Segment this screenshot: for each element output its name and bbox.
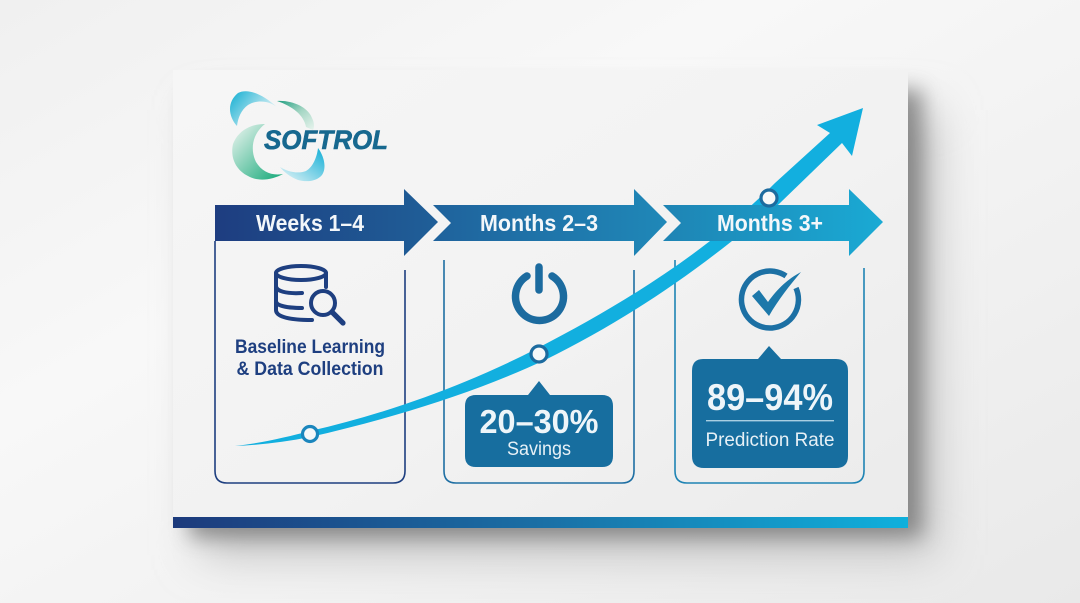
bottom gradient bar (173, 517, 908, 528)
panel: main card (173, 70, 908, 528)
panel: months 3+ (675, 260, 864, 483)
logo: Softrol (230, 91, 388, 181)
banner: months 2-3 (433, 189, 667, 256)
panel: weeks 1-4 (215, 241, 405, 483)
callout: savings (465, 381, 613, 467)
text: baseline learning: & Data Collection (236, 359, 384, 380)
banner: months 3+: Months 3+ (717, 210, 823, 236)
icon: power (516, 267, 564, 320)
curve node 3 (761, 190, 777, 206)
logo wordmark: SOFTROL (264, 125, 388, 155)
callout: prediction rate (692, 346, 848, 468)
banner: weeks 1-4 (215, 189, 438, 256)
callout: prediction rate: 89–94% (707, 377, 833, 418)
text: baseline learning: Baseline Learning (235, 337, 385, 358)
banner: weeks 1-4: Weeks 1–4 (256, 210, 364, 236)
logo swooshes (230, 91, 325, 181)
banner: months 2-3: Months 2–3 (480, 210, 598, 236)
panel: months 2-3 (444, 260, 634, 483)
callout: savings: 20–30% (480, 403, 598, 440)
text: baseline learning (235, 337, 385, 380)
callout: prediction rate: Prediction Rate (706, 430, 834, 451)
growth curve arrow (235, 108, 863, 446)
curve node 1 (302, 426, 318, 442)
curve node 2 (531, 346, 547, 362)
callout: savings: Savings (507, 439, 571, 460)
banner: months 3+ (663, 189, 883, 256)
icon: database with magnifier (276, 266, 343, 323)
icon: check circle (741, 271, 801, 328)
